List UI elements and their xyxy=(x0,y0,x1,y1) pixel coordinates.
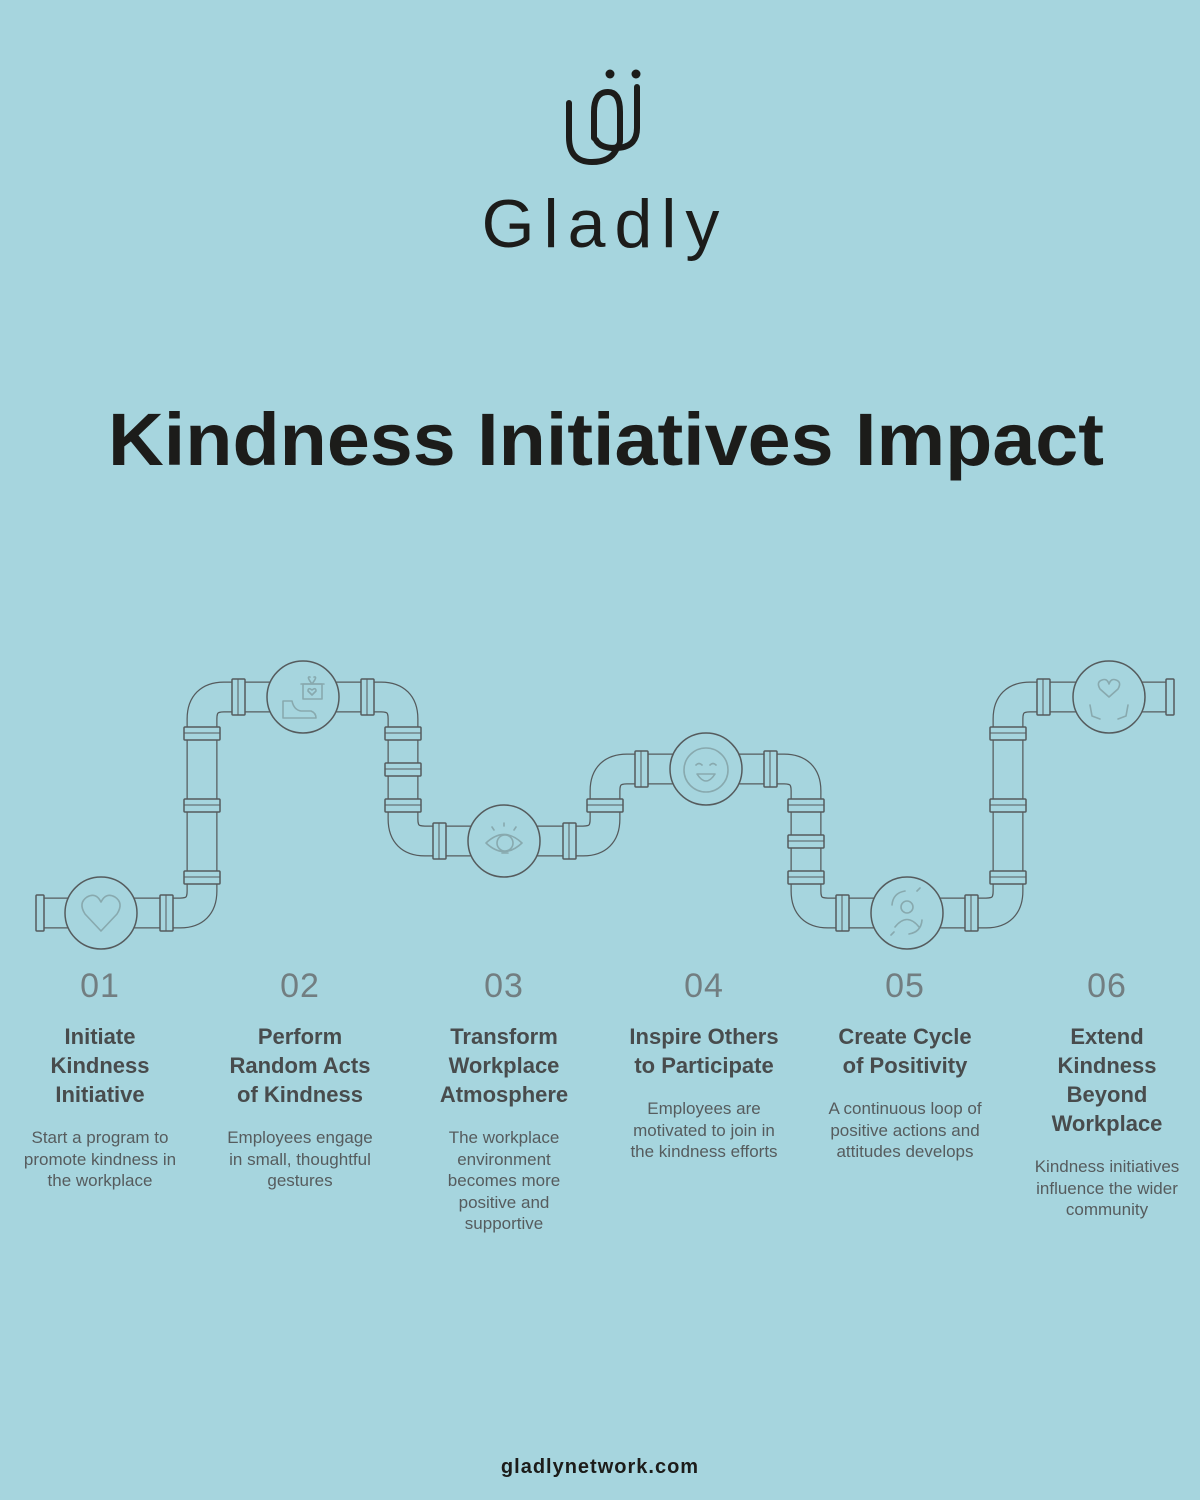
pipeline diagram xyxy=(35,660,1175,950)
step 02: in small, thoughtful xyxy=(229,1150,371,1168)
logo mark xyxy=(566,70,640,165)
step 03: Workplace xyxy=(449,1053,559,1078)
step 03: supportive xyxy=(465,1214,543,1233)
step 01: Kindness xyxy=(50,1053,150,1078)
end caps xyxy=(36,895,44,931)
step 06: 06 xyxy=(1087,967,1127,1005)
step 01: promote kindness in xyxy=(24,1150,176,1168)
step 02: Perform xyxy=(258,1024,342,1049)
step 04: the kindness efforts xyxy=(630,1142,778,1161)
step 01: 01 xyxy=(80,967,120,1005)
step 03 xyxy=(440,967,568,1233)
step 05: A continuous loop of xyxy=(828,1099,982,1118)
icons xyxy=(82,677,1128,935)
icon circles xyxy=(65,661,1145,949)
step 02: 02 xyxy=(280,967,320,1005)
step 02: Employees engage xyxy=(227,1128,373,1147)
footer url: gladlynetwork.com xyxy=(501,1456,699,1478)
step 03: positive and xyxy=(459,1192,549,1212)
step 03: The workplace xyxy=(449,1128,559,1147)
step 03: 03 xyxy=(484,967,524,1005)
step 04: motivated to join in xyxy=(633,1120,775,1140)
step 06: Beyond xyxy=(1067,1082,1147,1107)
step 03: Transform xyxy=(450,1024,558,1049)
step 01: Start a program to xyxy=(31,1128,168,1147)
vertical couplings xyxy=(184,727,220,740)
horizontal couplings xyxy=(160,895,173,931)
step 06: Kindness xyxy=(1057,1053,1157,1078)
step 02 xyxy=(227,967,373,1190)
step 01: Initiative xyxy=(55,1082,145,1107)
step 04: 04 xyxy=(684,967,724,1005)
step 03: environment xyxy=(457,1150,551,1168)
step 05: of Positivity xyxy=(843,1053,967,1078)
step 01: the workplace xyxy=(48,1171,152,1190)
step 02: Random Acts xyxy=(230,1053,370,1078)
step 06: Kindness initiatives xyxy=(1035,1157,1179,1176)
step 06: influence the wider xyxy=(1036,1178,1178,1198)
step 04: Employees are xyxy=(647,1099,761,1118)
step 05: attitudes develops xyxy=(836,1142,974,1161)
step 05: positive actions and xyxy=(830,1120,980,1140)
wordmark: Gladly xyxy=(482,186,728,262)
step 03: becomes more xyxy=(448,1171,560,1190)
step 05 xyxy=(828,967,982,1161)
step 01 xyxy=(24,967,176,1190)
step 06: Workplace xyxy=(1052,1111,1162,1136)
title: Kindness Initiatives Impact xyxy=(108,398,1104,481)
step 04: Inspire Others xyxy=(629,1024,779,1049)
step 06: Extend xyxy=(1070,1024,1144,1049)
step 05: Create Cycle xyxy=(838,1024,972,1049)
step 06: community xyxy=(1066,1200,1148,1219)
step 04 xyxy=(629,967,779,1161)
step 02: of Kindness xyxy=(237,1082,363,1107)
step 04: to Participate xyxy=(634,1053,774,1078)
step 01: Initiate xyxy=(65,1024,135,1049)
step 02: gestures xyxy=(267,1171,333,1190)
step 05: 05 xyxy=(885,967,925,1005)
step 06 xyxy=(1035,967,1179,1219)
step 03: Atmosphere xyxy=(440,1082,568,1107)
